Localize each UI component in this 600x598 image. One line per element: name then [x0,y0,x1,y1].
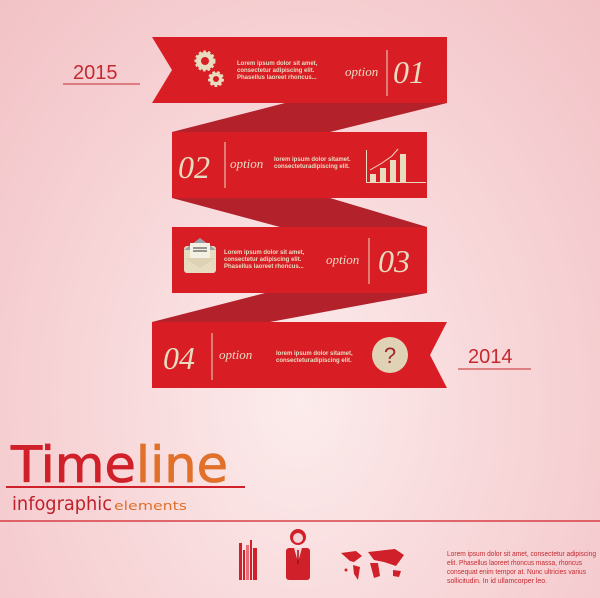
icon: envelope [184,238,216,273]
icon: gears [196,52,222,86]
title lines [6,486,245,488]
banner 3: Phasellus laoreet rhoncus... [224,264,304,270]
banner 2 [172,132,427,198]
year 2014: 2014 [468,346,512,368]
bottom text: elit. Phasellus laoreet rhoncus massa, rhoncus [447,560,582,567]
banner 3 [172,227,427,293]
icon: bar chart [366,149,426,183]
icon: world map [341,549,404,580]
bottom text: sollicitudin. In id ullamcorper leo. [447,578,547,585]
banner 4: consecteturadipiscing elit. [276,358,352,364]
banner 2: option [230,156,263,171]
banner 2: lorem ipsum dolor sitamet. [274,157,351,163]
year 2015 [63,62,140,84]
subtitle [12,493,187,515]
banner 3: 03 [378,243,410,279]
icon: question: ? [384,343,396,368]
subtitle: infographic [12,493,112,515]
icon: bars [239,540,257,580]
icon: question [372,337,408,373]
icon: person [286,529,310,580]
year 2014 [458,346,531,369]
title: Timeline [10,436,228,494]
banner 3: option [326,252,359,267]
connector bands [152,103,447,322]
banner 2: 02 [178,149,210,185]
banner 4: lorem ipsum dolor sitamet, [276,351,353,357]
banner 1 [152,37,447,103]
banner 3: Lorem ipsum dolor sit amet, [224,250,305,256]
banner 2: consecteturadipiscing elit. [274,164,350,170]
subtitle: elements [114,499,187,513]
banner 4: 04 [163,340,195,376]
banner 1: option [345,64,378,79]
banner 1: consectetur adipiscing elit. [237,68,315,74]
banner 4 [152,322,447,388]
banner 4: option [219,347,252,362]
bottom text: consequat enim tempor at. Nunc ultricies varius [447,569,586,576]
banner 1: 01 [393,54,425,90]
banner 1: Phasellus laoreet rhoncus... [237,75,317,81]
banner 3: consectetur adipiscing elit. [224,257,302,263]
banner 1: Lorem ipsum dolor sit amet, [237,61,318,67]
bottom text: Lorem ipsum dolor sit amet, consectetur adipiscing [447,551,596,558]
year 2015: 2015 [73,62,118,84]
bottom text [447,551,596,585]
